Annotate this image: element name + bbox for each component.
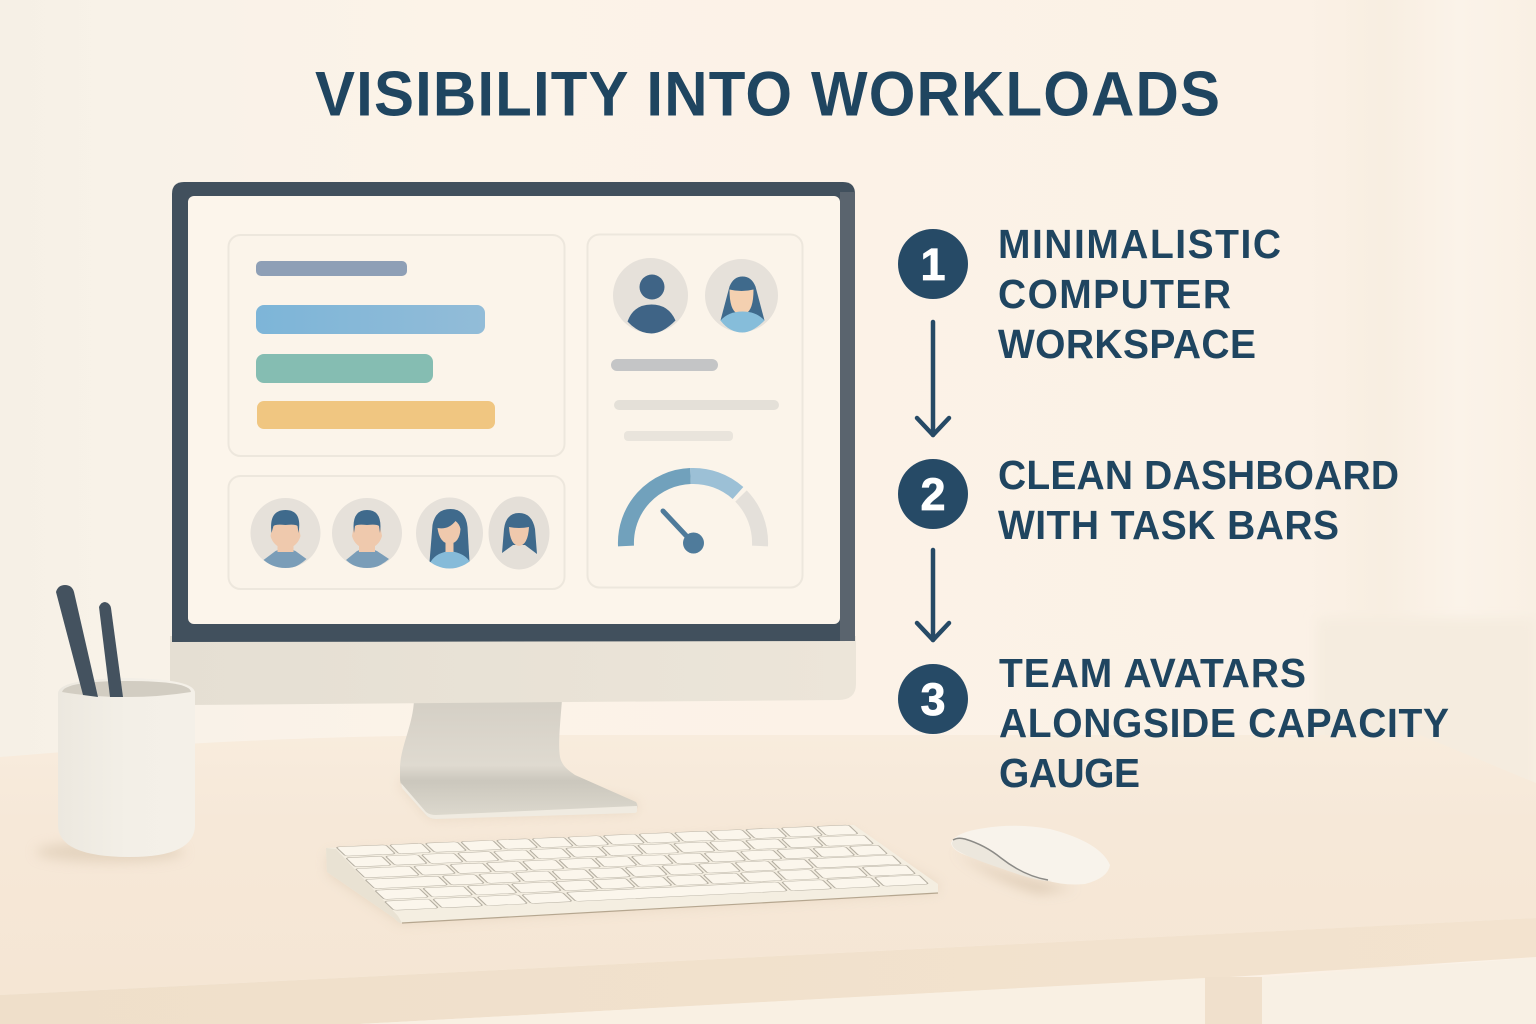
avatar: woman with blue top [705, 259, 778, 332]
avatar: woman 1 [416, 498, 483, 569]
avatar: woman 2 [488, 496, 550, 570]
text placeholder: line 2 [624, 431, 733, 441]
step 1 label: WORKSPACE [998, 322, 1256, 367]
arrow: step 1 to step 2 [917, 322, 949, 435]
avatar: person silhouette [613, 258, 688, 334]
step 2 label: WITH TASK BARS [998, 503, 1339, 548]
step 2 number badge [898, 459, 968, 529]
task bar: green [256, 354, 433, 383]
mouse [951, 826, 1110, 893]
panel: team avatars [228, 476, 564, 589]
task bar: header [256, 261, 407, 276]
pen 1 [56, 585, 98, 697]
step 1 label [998, 222, 1281, 367]
step 1 number badge: 1 [920, 239, 946, 290]
text placeholder: line 1 [614, 400, 779, 410]
pen 2 [99, 602, 123, 697]
monitor chin [170, 636, 856, 705]
task bar: blue [256, 305, 485, 334]
step 3 label: TEAM AVATARS [999, 651, 1306, 696]
monitor bezel [172, 182, 855, 642]
step 3 label: ALONGSIDE CAPACITY [999, 701, 1449, 746]
monitor screen [188, 196, 840, 624]
step 1 label: COMPUTER [998, 272, 1231, 317]
avatar: man 1 [250, 498, 320, 569]
pencil cup [36, 585, 195, 862]
task bar: yellow [257, 401, 495, 429]
panel: task bars [228, 235, 564, 456]
step 2 label: CLEAN DASHBOARD [998, 453, 1399, 498]
step 3 number badge: 3 [920, 674, 946, 725]
arrow: step 2 to step 3 [917, 550, 949, 640]
capacity gauge [626, 476, 760, 554]
title: VISIBILITY INTO WORKLOADS [315, 59, 1220, 130]
step 1 label: MINIMALISTIC [998, 222, 1281, 267]
text placeholder: grey bar [611, 359, 718, 371]
desk [0, 735, 1536, 1024]
step 2 label [998, 453, 1399, 548]
monitor stand [400, 700, 638, 819]
panel: capacity [588, 234, 802, 588]
step 3: team avatars alongside capacity gauge [898, 651, 1449, 796]
step 2: clean dashboard with task bars [898, 453, 1399, 548]
step 2 number badge: 2 [920, 469, 946, 520]
keyboard [326, 825, 938, 923]
step 3 number badge [898, 664, 968, 734]
monitor [170, 182, 856, 819]
avatar: man 2 [332, 498, 402, 569]
step 3 label [999, 651, 1449, 796]
step 1 number badge [898, 229, 968, 299]
step 1: minimalistic computer workspace [898, 222, 1281, 367]
step 3 label: GAUGE [999, 751, 1140, 796]
